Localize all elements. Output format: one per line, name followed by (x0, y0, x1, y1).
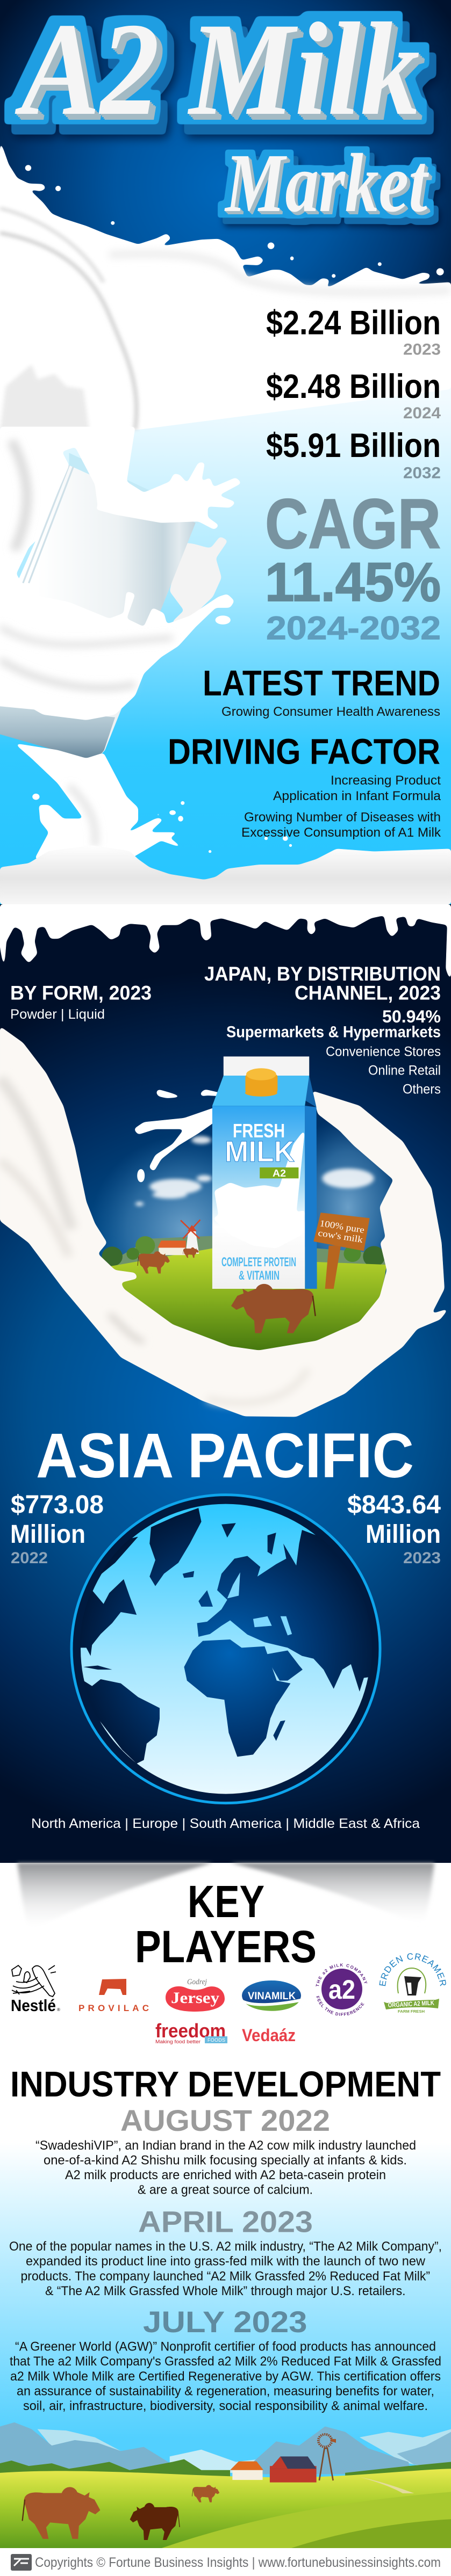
heading: Japan by distribution channel: CHANNEL, 2023 (295, 982, 441, 1004)
logo: a2 Milk Company: THE a2 MILK COMPANY (316, 1963, 368, 1987)
heading: Japan by distribution channel: Others (403, 1082, 441, 1097)
logo: Provilac: PROVILAC (78, 2003, 149, 2013)
carton milk splash (213, 1129, 305, 1248)
milk splashes near carton (134, 1090, 223, 1183)
badge on carton (260, 1167, 298, 1178)
glass edge highlights (23, 465, 73, 583)
event: August 2022 (35, 2103, 416, 2197)
milk carton scene (0, 1026, 449, 1417)
farmhouse (230, 2462, 263, 2480)
milk drips (0, 904, 451, 979)
event: August 2022: A2 milk products are enriched with A2 beta-casein protein (65, 2168, 386, 2182)
logo: Erden Creamery (379, 1953, 446, 2014)
heading: by form: Powder | Liquid (10, 1007, 105, 1022)
hills, trees and grass (102, 1236, 387, 1351)
driving factor: Increasing Product (331, 773, 441, 788)
logo: a2 Milk Company: a2 (328, 1975, 355, 2005)
logo: Erden Creamery: FARM FRESH (398, 2010, 425, 2014)
panel: industry development (0, 2064, 451, 2549)
heading: Japan by distribution channel: Online Retail (368, 1063, 441, 1078)
market value 2022: 2022 (11, 1549, 48, 1567)
event: August 2022: & are a great source of calcium. (138, 2182, 313, 2197)
logo: Vinamilk: VINAMILK (248, 1991, 296, 2002)
icon: Fortune Business Insights logo (11, 2554, 32, 2571)
carton text: fresh milk: & VITAMIN (239, 1268, 280, 1283)
milk pool at the bottom of hero (0, 845, 451, 904)
CAGR figure: 2024-2032 (266, 609, 441, 646)
carton text: fresh milk: A2 (273, 1168, 286, 1179)
event: August 2022: AUGUST 2022 (120, 2103, 330, 2137)
heading: key players: PLAYERS (135, 1921, 317, 1972)
tree line (0, 2459, 451, 2477)
small cows (138, 1247, 199, 1273)
logo: Freedom Foods: FOODS (207, 2037, 225, 2043)
heading: key players (135, 1876, 317, 1972)
windmill (318, 2434, 336, 2480)
milk ring behind glass (170, 536, 228, 624)
CAGR figure: 11.45% (265, 552, 441, 613)
logo: Erden Creamery: ERDEN CREAMERY (379, 1953, 446, 1986)
farm landscape (0, 2422, 451, 2549)
panel: footer (0, 2548, 451, 2576)
carton cap (245, 1068, 277, 1097)
clouds (135, 1136, 374, 1206)
carton body (212, 1056, 317, 1289)
shadow under dark section (17, 1863, 434, 1932)
market size 2023: 2023 (403, 341, 441, 359)
sky glow right (288, 1114, 409, 1300)
logo: Vinamilk (242, 1980, 301, 2011)
glass base (0, 706, 115, 761)
fields (0, 2469, 451, 2549)
logo: Erden Creamery: ORGANIC A2 MILK (388, 1999, 434, 2009)
glass body (0, 465, 196, 761)
market value 2023: $843.64 (347, 1491, 441, 1519)
event: April 2023: & “The A2 Milk Grassfed Whole Milk” through major U.S. retailers. (45, 2284, 405, 2298)
sky glow (89, 1136, 279, 1322)
milk stream and crown (0, 427, 241, 859)
farmhouse (158, 1240, 186, 1255)
logo: Godrej Jersey: Jersey (171, 1989, 219, 2007)
driving factor: Growing Number of Diseases with (244, 810, 441, 825)
market value 2022: $773.08 (11, 1491, 104, 1519)
logo: Vedaaz: Vedaáz (242, 2026, 296, 2045)
event: April 2023 (9, 2205, 442, 2298)
market value 2023 (347, 1491, 441, 1567)
event: April 2023: products. The company launched “A2 Milk Grassfed 2% Reduced Fat Milk” (20, 2269, 430, 2283)
market value 2023: Million (366, 1520, 441, 1549)
large cow (231, 1284, 316, 1333)
logo: a2 Milk Company: FEEL THE DIFFERENCE (316, 1996, 364, 2016)
wooden sign: 100% pure (319, 1218, 365, 1235)
logo: Freedom Foods: Making food better (155, 2039, 201, 2044)
heading: Asia Pacific: ASIA PACIFIC (36, 1420, 414, 1491)
wooden sign (313, 1213, 370, 1289)
logo: Godrej Jersey (166, 1978, 225, 2012)
latest trend (203, 663, 440, 719)
milk splash: top wave (0, 140, 451, 430)
event: April 2023: expanded its product line into grass-fed milk with the launch of two new (26, 2254, 425, 2269)
logo: a2 Milk Company (316, 1963, 368, 2016)
globe (70, 1493, 382, 1804)
driving factor: Excessive Consumption of A1 Milk (241, 825, 441, 840)
mountains (0, 2422, 451, 2474)
CAGR figure (265, 484, 441, 646)
cows on field (23, 2485, 219, 2540)
heading: Japan by distribution channel: JAPAN, BY DISTRIBUTION (204, 963, 441, 985)
milk ring shading (0, 1078, 308, 1403)
hero deep blue background (0, 0, 451, 306)
carton text: fresh milk: COMPLETE PROTEIN (221, 1255, 296, 1269)
market size 2032 (266, 427, 441, 482)
market value 2022 (10, 1491, 104, 1567)
event: July 2023 (10, 2305, 441, 2413)
market value 2022: Million (10, 1520, 85, 1549)
event: July 2023: an assurance of sustainability & regeneration, measuring benefits for water, (17, 2384, 434, 2398)
milk ring and left wave (0, 1026, 449, 1417)
market size 2024 (266, 368, 441, 422)
carton text: fresh milk: FRESH (233, 1120, 285, 1142)
driving factor (168, 731, 441, 840)
other regions list: North America | Europe | South America | Middle East & Africa (31, 1816, 420, 1831)
section dark blue background (0, 904, 451, 1863)
driving factor: Application in Infant Formula (273, 789, 441, 803)
glass of milk with swirl (0, 427, 292, 859)
carton text: fresh milk (221, 1120, 296, 1283)
pale rim of the glass (69, 453, 198, 524)
heading: key players: KEY (188, 1876, 264, 1927)
heading: Japan by distribution channel: Convenience Stores (326, 1044, 441, 1059)
logo: Provilac (78, 1979, 149, 2013)
event: August 2022: one-of-a-kind A2 Shishu milk focusing specially at infants & kids. (44, 2153, 407, 2167)
panel: distribution and regional section (0, 904, 451, 1863)
heading: by form: BY FORM, 2023 (10, 982, 152, 1004)
event: July 2023: “A Greener World (AGW)” Nonprofit certifier of food products has announced (15, 2340, 436, 2354)
market size 2032: 2032 (403, 464, 441, 482)
milk folds (0, 440, 173, 846)
panel: hero (0, 0, 451, 908)
red barn (270, 2456, 317, 2483)
logo: Nestle: Nestlé (11, 1996, 56, 2015)
logo: Nestle (11, 1965, 60, 2015)
logo: Nestle: ® (57, 2007, 60, 2012)
event: April 2023: APRIL 2023 (138, 2205, 313, 2239)
windmill (181, 1220, 200, 1254)
heading: Japan by distribution channel (204, 963, 441, 1097)
market value 2023: 2023 (403, 1549, 441, 1567)
event: July 2023: JULY 2023 (143, 2305, 307, 2339)
logo: Freedom Foods: freedom (155, 2020, 226, 2042)
heading: by form (10, 982, 152, 1022)
event: August 2022: “SwadeshiVIP”, an Indian brand in the A2 cow milk industry launched (35, 2138, 416, 2153)
latest trend: Growing Consumer Health Awareness (221, 705, 440, 719)
section sky background (0, 2143, 451, 2548)
footer background (0, 2548, 451, 2576)
wooden sign: cow's milk (317, 1228, 364, 1245)
carton text: fresh milk: MILK (225, 1135, 295, 1168)
market size 2023 (266, 304, 441, 359)
event: July 2023: soil, air, infrastructure, biodiversity, social responsibility & animal welfare. (23, 2399, 428, 2413)
logo: Godrej Jersey: Godrej (187, 1978, 207, 1986)
panel: key players (11, 1860, 446, 2045)
market size 2024: 2024 (403, 404, 441, 422)
hero sky background (0, 285, 451, 908)
heading: Japan by distribution channel: 50.94% (382, 1007, 441, 1026)
